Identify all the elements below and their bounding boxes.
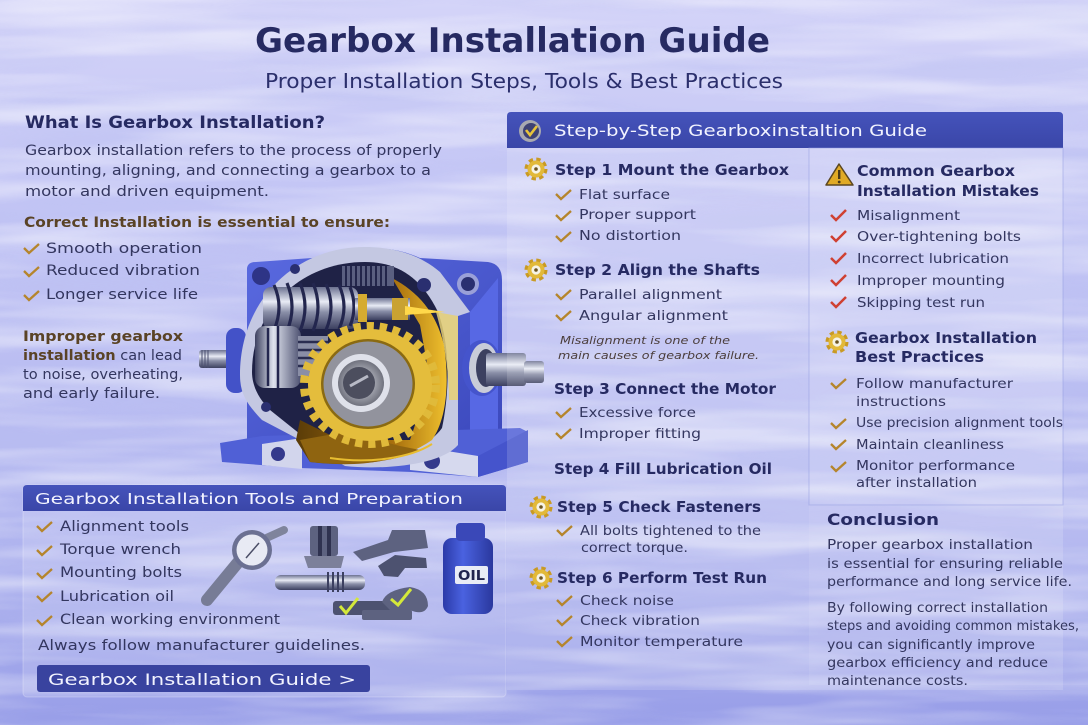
step 1: [526, 160, 789, 244]
icon: oil bottle: [443, 523, 493, 614]
panel: tools and preparation: [23, 485, 506, 697]
button: [37, 665, 370, 692]
icon: bolts and brackets: [275, 526, 428, 620]
benefits checklist: Longer service life: [46, 287, 198, 303]
best practices: Use precision alignment tools: [856, 415, 1063, 431]
conclusion second paragraph: gearbox efficiency and reduce: [827, 655, 1048, 671]
title: Gearbox Installation Guide: [255, 21, 770, 61]
guide header bar: [507, 112, 1063, 148]
tools checklist: Torque wrench: [59, 542, 181, 558]
conclusion second paragraph: maintenance costs.: [827, 673, 968, 689]
tools checklist: Lubrication oil: [60, 589, 174, 605]
common mistakes: [826, 162, 1039, 311]
step 2: Angular alignment: [579, 308, 728, 324]
benefits checklist: Reduced vibration: [46, 263, 200, 279]
improper installation warning: to noise, overheating,: [23, 367, 183, 383]
step 6: Monitor temperature: [580, 634, 743, 650]
icon: oil bottle: OIL: [458, 569, 485, 584]
cut-away casing ring: [240, 247, 470, 467]
tools checklist: Alignment tools: [60, 519, 189, 535]
intro paragraph: mounting, aligning, and connecting a gearbox to a: [25, 163, 431, 179]
icon: dial gauge wrench: [207, 530, 284, 600]
step 1: Flat surface: [579, 187, 670, 203]
step 3: Improper fitting: [579, 426, 701, 442]
tools checklist: [37, 519, 281, 628]
step 1: Step 1 Mount the Gearbox: [555, 161, 789, 179]
panel: step-by-step guide: [507, 112, 1063, 690]
icon: green check marks: [340, 589, 411, 613]
common mistakes: Skipping test run: [857, 295, 985, 311]
best practices: [828, 329, 1063, 491]
benefits checklist: [24, 241, 202, 303]
housing: [220, 248, 528, 477]
subtitle: Proper Installation Steps, Tools & Best Practices: [265, 69, 783, 93]
best practices: Best Practices: [855, 348, 984, 366]
tools checklist: Clean working environment: [60, 612, 281, 628]
tools checklist: Mounting bolts: [60, 565, 182, 581]
improper installation warning: Improper gearbox: [23, 329, 183, 345]
intro paragraph: motor and driven equipment.: [25, 184, 269, 200]
conclusion heading: Conclusion: [827, 510, 939, 529]
guideline note: Always follow manufacturer guidelines.: [38, 638, 365, 654]
step 6: Check noise: [580, 593, 674, 609]
step 6: Step 6 Perform Test Run: [557, 569, 767, 587]
intro heading: What Is Gearbox Installation?: [25, 113, 325, 133]
icon: check badge: [519, 120, 541, 142]
conclusion second paragraph: [827, 600, 1079, 689]
guide header bar: Step-by-Step Gearboxinstaltion Guide: [554, 121, 927, 140]
main gold gear: [307, 329, 433, 441]
ensure heading: Correct Installation is essential to ensure:: [24, 215, 390, 231]
best practices: after installation: [856, 475, 977, 491]
button: Gearbox Installation Guide >: [48, 670, 356, 689]
step 5: All bolts tightened to the: [580, 523, 761, 539]
step 3: [554, 380, 777, 442]
step 2: main causes of gearbox failure.: [558, 349, 759, 362]
step 3: Step 3 Connect the Motor: [554, 380, 777, 398]
step 5: correct torque.: [581, 540, 688, 556]
step 6: [532, 568, 767, 650]
conclusion first paragraph: [827, 537, 1072, 590]
intro text block: [23, 113, 442, 402]
best practices: Gearbox Installation: [855, 329, 1037, 347]
common mistakes: Common Gearbox: [857, 162, 1015, 180]
step 6: Check vibration: [580, 613, 700, 629]
common mistakes: Installation Mistakes: [857, 182, 1039, 200]
conclusion second paragraph: steps and avoiding common mistakes,: [827, 618, 1079, 634]
step 1: No distortion: [579, 228, 681, 244]
step 1: Proper support: [579, 207, 696, 223]
conclusion second paragraph: you can significantly improve: [827, 637, 1035, 653]
panel: conclusion: [809, 505, 1088, 689]
improper installation warning: [23, 329, 183, 402]
tools header bar: Gearbox Installation Tools and Preparation: [35, 490, 463, 508]
common mistakes: Over-tightening bolts: [857, 229, 1021, 245]
step 5: Step 5 Check Fasteners: [557, 498, 761, 516]
icon: warning triangle: [826, 164, 853, 185]
conclusion second paragraph: By following correct installation: [827, 600, 1048, 616]
step 3: Excessive force: [579, 405, 696, 421]
common mistakes: Incorrect lubrication: [857, 251, 1009, 267]
bearing: [255, 326, 328, 388]
step 5: [532, 498, 761, 556]
best practices: instructions: [856, 394, 946, 410]
worm shaft: [263, 283, 445, 331]
panel: right column backing: [809, 148, 1063, 505]
best practices: Monitor performance: [856, 458, 1015, 474]
improper installation warning: installation can lead: [23, 348, 182, 364]
improper installation warning: and early failure.: [23, 386, 160, 402]
gearbox illustration: [199, 247, 544, 477]
step 2: Misalignment is one of the: [560, 334, 730, 347]
right output shaft: [462, 340, 544, 396]
benefits checklist: Smooth operation: [46, 241, 202, 257]
conclusion first paragraph: is essential for ensuring reliable: [827, 556, 1063, 572]
left input shaft: [199, 328, 246, 393]
conclusion first paragraph: performance and long service life.: [827, 574, 1072, 590]
best practices: Follow manufacturer: [856, 376, 1013, 392]
common mistakes: Misalignment: [857, 208, 960, 224]
step 2: Step 2 Align the Shafts: [555, 261, 760, 279]
step 4: Step 4 Fill Lubrication Oil: [554, 460, 772, 478]
common mistakes: Improper mounting: [857, 273, 1005, 289]
intro paragraph: Gearbox installation refers to the process of properly: [25, 143, 442, 159]
conclusion first paragraph: Proper gearbox installation: [827, 537, 1033, 553]
tools header bar: [23, 485, 506, 511]
best practices: Maintain cleanliness: [856, 437, 1004, 453]
step 2: [526, 260, 760, 362]
step 2: Parallel alignment: [579, 287, 722, 303]
intro paragraph: [25, 143, 442, 200]
